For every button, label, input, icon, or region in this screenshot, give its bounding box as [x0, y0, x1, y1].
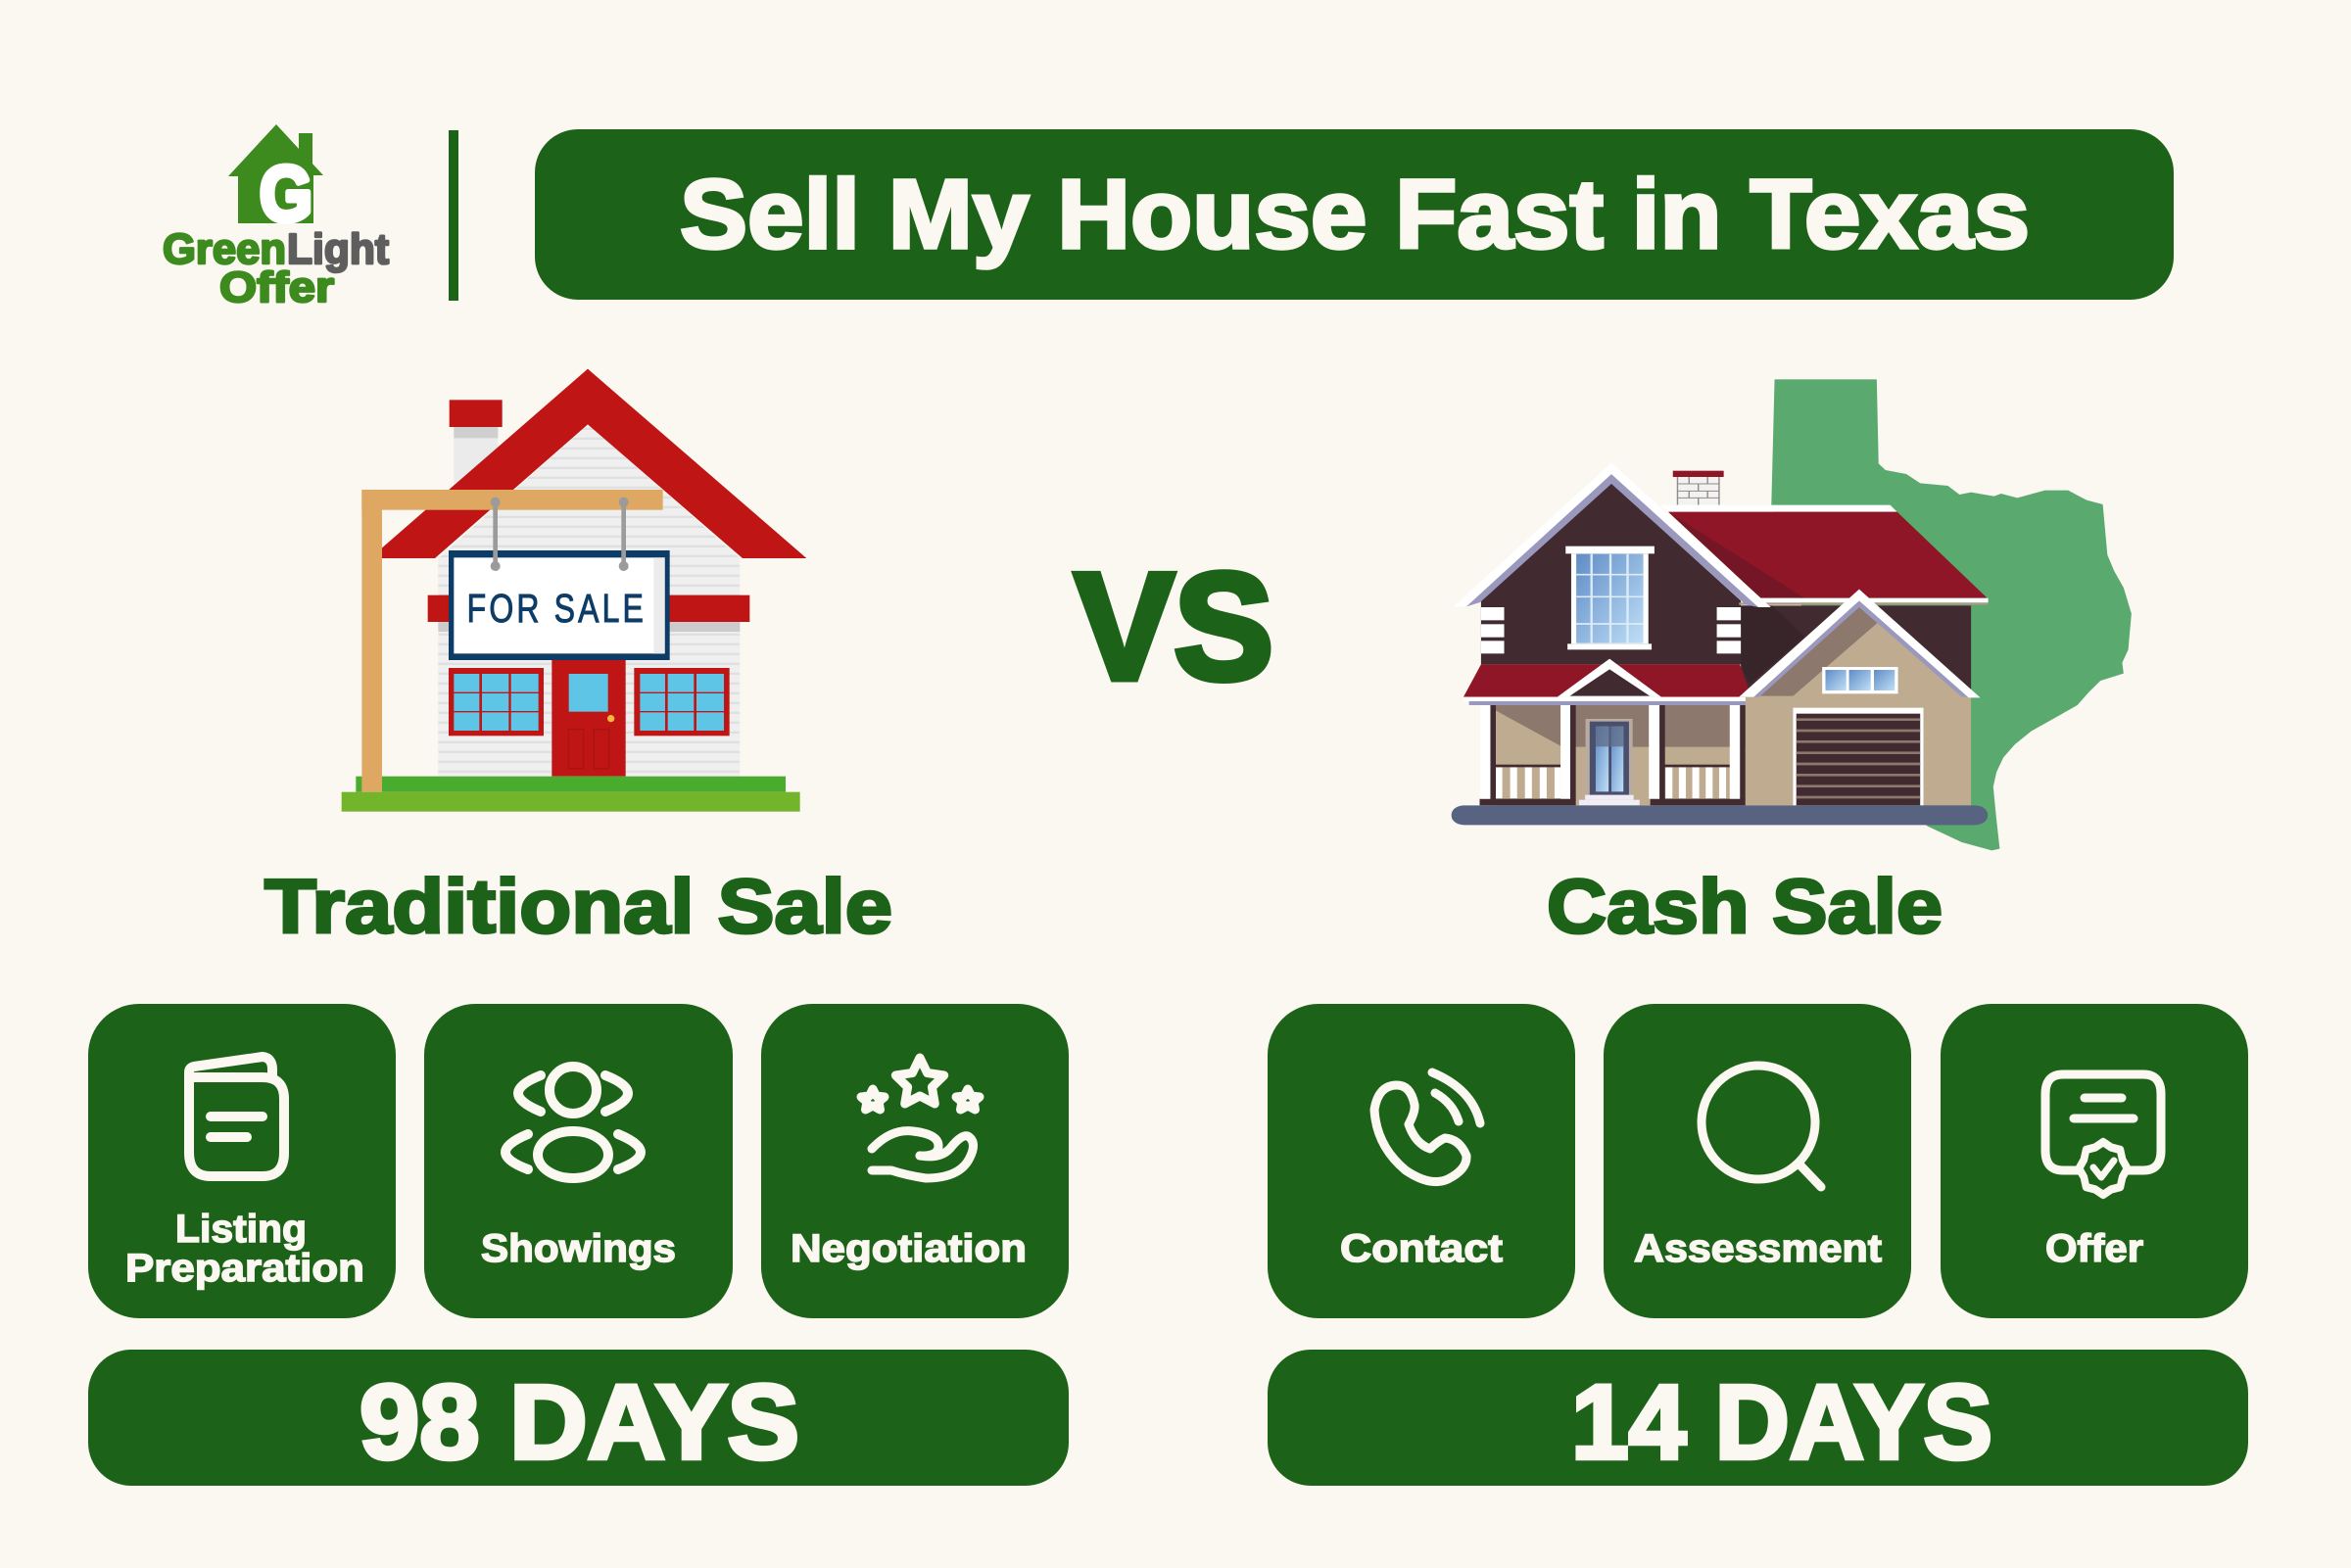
- label: Contact: Contact: [1340, 1227, 1503, 1270]
- panel: Showings: [424, 1004, 733, 1318]
- illustration: for sale house: [342, 369, 806, 812]
- panel: Contact: [1268, 1004, 1575, 1318]
- icon: people: [505, 1067, 641, 1178]
- logo: GreenLight Offer: G: [260, 150, 312, 237]
- illustration: for sale house: FOR SALE: [467, 586, 647, 631]
- icon: phone: [1374, 1072, 1480, 1182]
- label: Listing Preparation: Preparation: [125, 1247, 364, 1290]
- divider bar: [449, 130, 458, 301]
- logo: GreenLight Offer: Green: [163, 225, 286, 273]
- label: Offer: Offer: [2045, 1227, 2143, 1270]
- icon: magnifying glass: [1702, 1066, 1821, 1187]
- icon: hand with stars: [861, 1058, 980, 1178]
- heading: Traditional Sale: Traditional Sale: [264, 863, 892, 949]
- banner: 14 days: [1268, 1350, 2248, 1486]
- title banner: [535, 129, 2174, 300]
- panel: Assessment: [1604, 1004, 1911, 1318]
- icon: certificate: [2045, 1074, 2161, 1195]
- illustration: Texas map with house: [1452, 379, 2132, 850]
- title banner: Sell My House Fast in Texas: [680, 160, 2030, 269]
- logo: GreenLight Offer: [163, 124, 389, 311]
- label: Assessment: Assessment: [1634, 1227, 1882, 1270]
- panel: Listing Preparation: [88, 1004, 396, 1318]
- banner: 98 days: 98 DAYS: [360, 1362, 799, 1481]
- logo: GreenLight Offer: Offer: [219, 263, 334, 311]
- heading: Cash Sale: Cash Sale: [1547, 863, 1943, 949]
- banner: 98 days: [88, 1350, 1069, 1486]
- icon: document: [189, 1057, 284, 1176]
- label: Showings: Showings: [481, 1227, 676, 1270]
- VS label: VS: [1075, 542, 1273, 711]
- panel: Negotiation: [761, 1004, 1069, 1318]
- panel: Offer: [1941, 1004, 2248, 1318]
- logo: GreenLight Offer: Light: [287, 225, 389, 273]
- label: Listing Preparation: [125, 1208, 364, 1290]
- label: Listing Preparation: Listing: [175, 1208, 307, 1251]
- label: Negotiation: Negotiation: [791, 1227, 1027, 1270]
- banner: 14 days: 14 DAYS: [1571, 1362, 1992, 1481]
